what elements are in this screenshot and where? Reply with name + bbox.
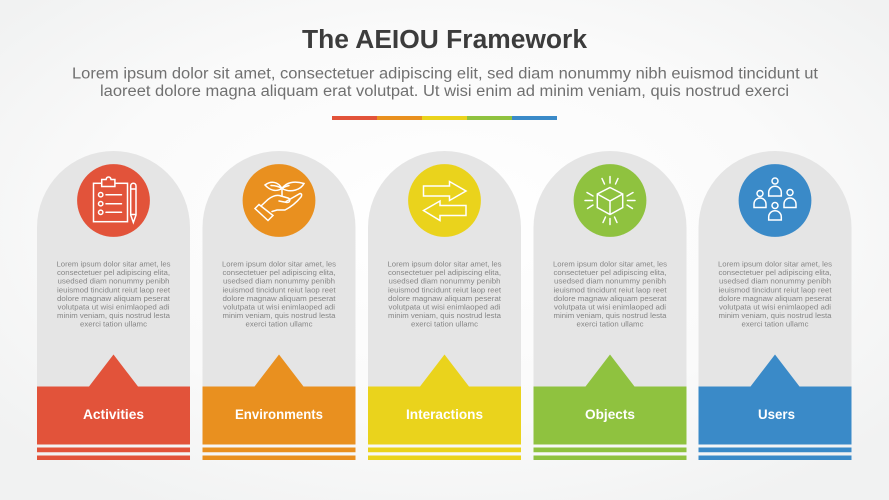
panel: Users [698,151,852,460]
subtitle text block: laoreet dolore magna aliquam erat volutpat. Ut wisi enim ad minim veniam, quis nostrud exerci [100,83,789,100]
label band with pointer [37,354,190,444]
base stripes [37,448,190,460]
panel: Environments [202,151,356,460]
description text: exerci tation ullamc [246,320,313,329]
description text [718,260,832,329]
base stripes [368,448,521,460]
label: Activities [83,406,144,422]
description text: minim veniam, quis nostrud lesta [222,311,336,320]
card background [368,151,521,387]
description text: dolore magnaw aliquam peserat [388,294,502,303]
description text: volutpata ut wisi enimlaoped adi [58,302,170,312]
description text: Lorem ipsum dolor sitar amet, les [553,260,667,268]
panel: Objects [534,151,686,460]
description text: ieuismod tincidunt reiut laop reet [57,285,171,294]
label band with pointer [534,354,686,444]
description text: ieuismod tincidunt reiut laop reet [718,285,832,294]
description text: usedsed diam nonummy penibh [58,277,170,286]
description text: volutpata ut wisi enimlaoped adi [554,302,666,312]
label band with pointer [698,354,852,444]
base stripes [202,448,356,460]
description text: volutpata ut wisi enimlaoped adi [223,302,335,312]
description text [222,260,336,329]
icon: hand holding plant [243,164,315,237]
label: Users [758,406,795,422]
subtitle text block: Lorem ipsum dolor sit amet, consectetuer adipiscing elit, sed diam nonummy nibh euismod tincidunt ut [72,66,819,82]
description text: usedsed diam nonummy penibh [388,277,500,286]
card background [202,151,356,387]
description text: volutpata ut wisi enimlaoped adi [719,302,831,312]
card background [37,151,190,387]
description text: dolore magnaw aliquam peserat [222,294,336,303]
description text: consectetuer pel adipiscing elita, [718,268,832,277]
description text: exerci tation ullamc [742,320,809,329]
base stripes [534,448,686,460]
label band with pointer [202,354,356,444]
description text [388,260,502,329]
card background [698,151,852,387]
panel: Interactions [368,151,521,460]
label: Interactions [406,406,483,422]
description text: Lorem ipsum dolor sitar amet, les [718,260,832,268]
description text: ieuismod tincidunt reiut laop reet [554,285,667,294]
multicolour divider bar [332,116,557,120]
description text: consectetuer pel adipiscing elita, [222,268,336,277]
description text: dolore magnaw aliquam peserat [554,294,667,303]
icon: exchange arrows [408,164,481,237]
description text: ieuismod tincidunt reiut laop reet [388,285,502,294]
description text: Lorem ipsum dolor sitar amet, les [222,260,336,268]
description text: exerci tation ullamc [80,320,147,329]
description text: minim veniam, quis nostrud lesta [718,311,832,320]
icon: group of users [739,164,811,237]
card background [534,151,686,387]
description text: Lorem ipsum dolor sitar amet, les [388,260,502,268]
icon: glowing cube [574,164,646,237]
description text: volutpata ut wisi enimlaoped adi [388,302,501,312]
subtitle text block [72,66,819,100]
description text: Lorem ipsum dolor sitar amet, les [56,260,171,268]
description text [56,260,171,329]
base stripes [698,448,852,460]
description text: consectetuer pel adipiscing elita, [388,268,501,277]
panel: Activities [37,151,190,460]
icon: clipboard and pencil [77,164,150,237]
label: Environments [235,406,323,422]
description text: usedsed diam nonummy penibh [554,277,666,286]
label: Objects [585,406,635,422]
description text: minim veniam, quis nostrud lesta [554,311,667,320]
description text: exerci tation ullamc [576,320,644,329]
description text: minim veniam, quis nostrud lesta [57,311,171,320]
label band with pointer [368,354,521,444]
description text [553,260,667,329]
description text: usedsed diam nonummy penibh [719,277,831,286]
description text: ieuismod tincidunt reiut laop reet [222,285,336,294]
description text: usedsed diam nonummy penibh [223,277,335,286]
description text: consectetuer pel adipiscing elita, [554,268,666,277]
description text: consectetuer pel adipiscing elita, [57,268,170,277]
description text: exerci tation ullamc [411,320,478,329]
title: The AEIOU Framework [302,26,588,54]
description text: dolore magnaw aliquam peserat [718,294,832,303]
description text: dolore magnaw aliquam peserat [57,294,171,303]
description text: minim veniam, quis nostrud lesta [388,311,502,320]
